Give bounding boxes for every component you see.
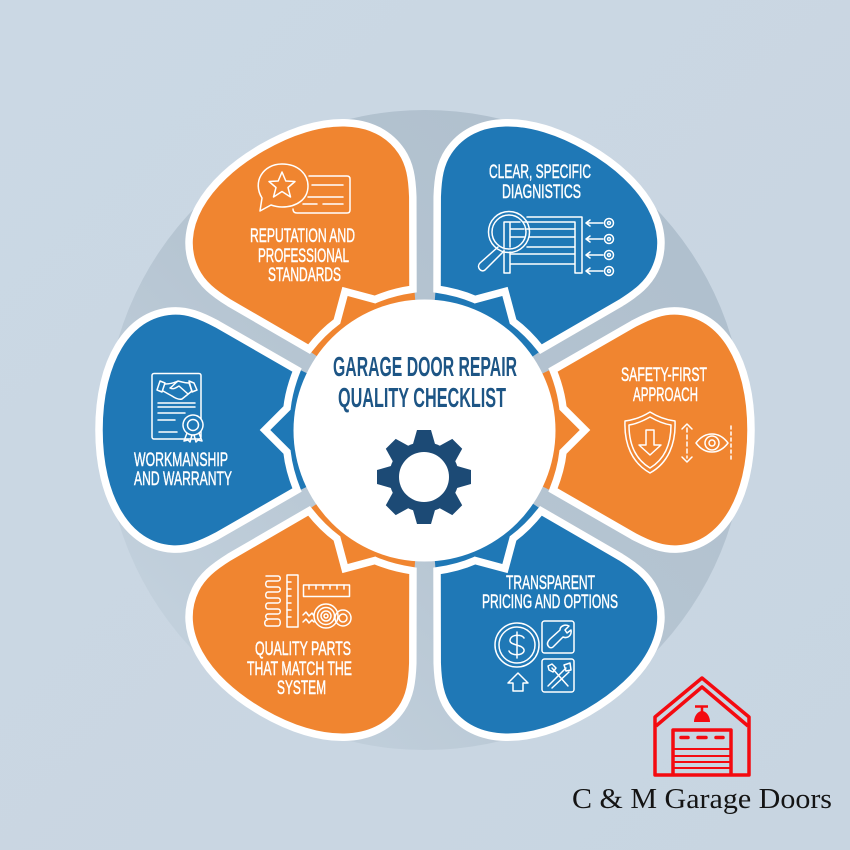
icon: spring, rulers and gears [265,575,351,628]
label: transparent pricing and options: TRANSPARENT [506,573,595,594]
label: reputation and professional standards [250,226,355,286]
label: workmanship and warranty: WORKMANSHIP [134,450,228,471]
label: quality parts that match the system [247,639,352,699]
label: safety-first approach [621,365,707,406]
label: reputation and professional standards: PROFESSIONAL [258,246,349,267]
panel: workmanship and warranty [99,311,425,549]
icon: magnifier over garage door with arrows [479,212,614,276]
title: GARAGE DOOR REPAIR [333,351,517,382]
background disc [105,110,745,750]
panel: safety-first approach [425,311,751,549]
label: workmanship and warranty: AND WARRANTY [134,469,232,490]
title [333,351,517,413]
label: quality parts that match the system: SYSTEM [277,678,326,699]
panel: transparent pricing and options [370,398,691,772]
panel: quality parts that match the system [159,398,480,772]
label: workmanship and warranty [134,450,232,490]
label: reputation and professional standards: STANDARDS [268,265,341,286]
label: clear, specific diagnostics [489,162,591,203]
panel: reputation and professional standards [159,88,480,462]
icon: coin, arrow and tools [495,621,574,692]
icon: gear [377,430,471,524]
label: transparent pricing and options [482,573,618,613]
icon: speech bubble with star and review card [258,164,350,213]
label: reputation and professional standards: REPUTATION AND [250,226,355,247]
icon: red garage [655,678,749,775]
label: clear, specific diagnostics: CLEAR, SPECIFIC [489,162,591,183]
center hub [294,300,556,562]
label: safety-first approach: APPROACH [633,385,698,406]
icon: shield, arrow and eye [625,412,731,473]
icon: warranty document with handshake and seal [152,374,203,442]
label: clear, specific diagnostics: DIAGNISTICS [502,182,581,203]
label: quality parts that match the system: QUALITY PARTS [255,639,351,660]
label: quality parts that match the system: THAT MATCH THE [247,659,352,680]
brand name: C & M Garage Doors [572,783,832,815]
label: safety-first approach: SAFETY-FIRST [621,365,707,386]
title: QUALITY CHECKLIST [338,382,506,413]
logo: C & M Garage Doors [572,678,832,815]
panel: clear, specific diagnostics [370,88,691,462]
label: transparent pricing and options: PRICING AND OPTIONS [482,592,618,613]
